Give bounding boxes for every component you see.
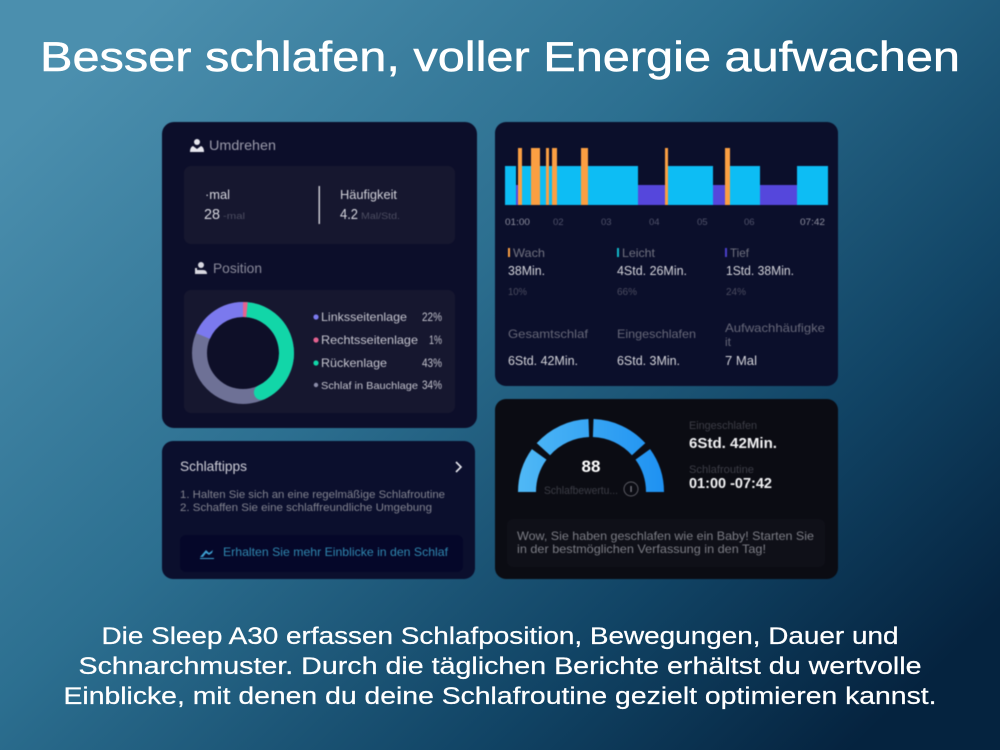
stat: Schlafroutine: Schlafroutine: [689, 464, 754, 476]
card: Umdrehen stats: ·mal: [205, 188, 230, 202]
icon: info: [624, 482, 638, 496]
chart axis labels: 03: [601, 217, 612, 228]
stat: Gesamtschlaf: Gesamtschlaf: [508, 327, 589, 341]
tips text: 2. Schaffen Sie eine schlaffreundliche Umgebung: [180, 502, 432, 514]
stat: Tief: 24%: [726, 287, 746, 298]
heading: Position: Position: [213, 260, 262, 276]
stat: Gesamtschlaf: [508, 327, 589, 368]
stat: Aufwachhäufigkeit: Aufwachhäufigke: [725, 321, 825, 335]
stat: Wach: 38Min.: [508, 263, 545, 278]
message box: in der bestmöglichen Verfassung in den Tag!: [517, 542, 766, 556]
stat: Schlafroutine: 01:00 -07:42: [689, 475, 772, 492]
panel: sleep phases: [495, 122, 838, 386]
card: Umdrehen stats: -mal: [223, 211, 245, 221]
card: Umdrehen stats: [184, 166, 455, 244]
legend: Linksseitenlage: [321, 310, 407, 324]
title: Besser schlafen, voller Energie aufwachen: [40, 33, 960, 80]
button: insights: Erhalten Sie mehr Einblicke in den Schlaf: [223, 545, 449, 559]
legend: Schlaf in Bauchlage: [321, 380, 418, 392]
chart axis labels: 07:42: [800, 217, 825, 228]
panel: Schlaftipps: [162, 441, 475, 579]
stat: Eingeschlafen: 6Std. 42Min.: [689, 435, 777, 452]
stat: Leicht: 4Std. 26Min.: [617, 263, 687, 278]
chart axis labels: 01:00: [505, 217, 530, 228]
stat: Aufwachhäufigkeit: 7 Mal: [725, 353, 757, 368]
icon: Umdrehen: [190, 139, 204, 152]
donut chart: [200, 310, 286, 396]
stat: Eingeschlafen: Eingeschlafen: [689, 420, 757, 432]
gauge: [527, 428, 655, 492]
description text: Die Sleep A30 erfassen Schlafposition, Bewegungen, Dauer und: [102, 623, 898, 650]
stat: Leicht: Leicht: [622, 246, 656, 260]
card: Umdrehen stats: 28: [204, 206, 220, 223]
icon: Position: [195, 262, 207, 274]
legend: 1%: [429, 333, 442, 347]
legend: 22%: [422, 310, 442, 324]
description text: [64, 623, 936, 710]
chart axis labels: 06: [744, 217, 755, 228]
message box: Wow, Sie haben geschlafen wie ein Baby! Starten Sie: [517, 529, 814, 543]
description text: Einblicke, mit denen du deine Schlafroutine gezielt optimieren kannst.: [64, 683, 936, 710]
card: Position: [184, 290, 455, 413]
stat: Gesamtschlaf: 6Std. 42Min.: [508, 353, 578, 368]
panel: sleep score: [495, 399, 838, 579]
legend: [313, 310, 442, 392]
score: 88: [582, 457, 600, 476]
stat: Wach: Wach: [513, 246, 545, 260]
card: Umdrehen stats: Mal/Std.: [361, 211, 400, 221]
legend: 34%: [422, 378, 442, 392]
chart axis labels: 05: [697, 217, 708, 228]
icon: chevron: [456, 462, 461, 472]
chart axis labels: [505, 217, 825, 228]
stat: Aufwachhäufigkeit: it: [725, 335, 732, 349]
stat: Eingeschlafen: [617, 327, 696, 368]
heading: Umdrehen: Umdrehen: [209, 137, 276, 153]
stat: Schlafroutine: [689, 464, 772, 492]
stat: Tief: Tief: [730, 246, 750, 260]
stat: Tief: [725, 246, 794, 298]
stat: Wach: [508, 246, 545, 298]
legend: Rechtsseitenlage: [321, 333, 418, 347]
stat: Eingeschlafen: [689, 420, 777, 452]
stat: Leicht: [617, 246, 687, 298]
heading: Schlaftipps: Schlaftipps: [180, 458, 247, 474]
chart axis labels: 04: [649, 217, 660, 228]
button: insights: [180, 535, 463, 572]
description text: Schnarchmuster. Durch die täglichen Berichte erhältst du wertvolle: [78, 653, 922, 680]
legend: 43%: [422, 356, 442, 370]
chart axis labels: 02: [553, 217, 564, 228]
stat: Leicht: 66%: [617, 287, 637, 298]
card: Umdrehen stats: 4.2: [340, 206, 358, 223]
chart: sleep stages: [505, 148, 828, 205]
tips text: 1. Halten Sie sich an eine regelmäßige Schlafroutine: [180, 489, 445, 501]
stat: Eingeschlafen: Eingeschlafen: [617, 327, 696, 341]
stat: Tief: 1Std. 38Min.: [726, 263, 794, 278]
legend: Rückenlage: [321, 356, 387, 370]
message box: [507, 519, 825, 567]
stat: Aufwachhäufigkeit: [725, 321, 825, 368]
stat: Wach: 10%: [508, 287, 527, 298]
tips text: [180, 489, 445, 514]
panel: Umdrehen and Position: [162, 122, 477, 428]
card: Umdrehen stats: Häufigkeit: [340, 188, 398, 202]
stat: Eingeschlafen: 6Std. 3Min.: [617, 353, 680, 368]
score label: Schlafbewertu...: [544, 485, 618, 497]
